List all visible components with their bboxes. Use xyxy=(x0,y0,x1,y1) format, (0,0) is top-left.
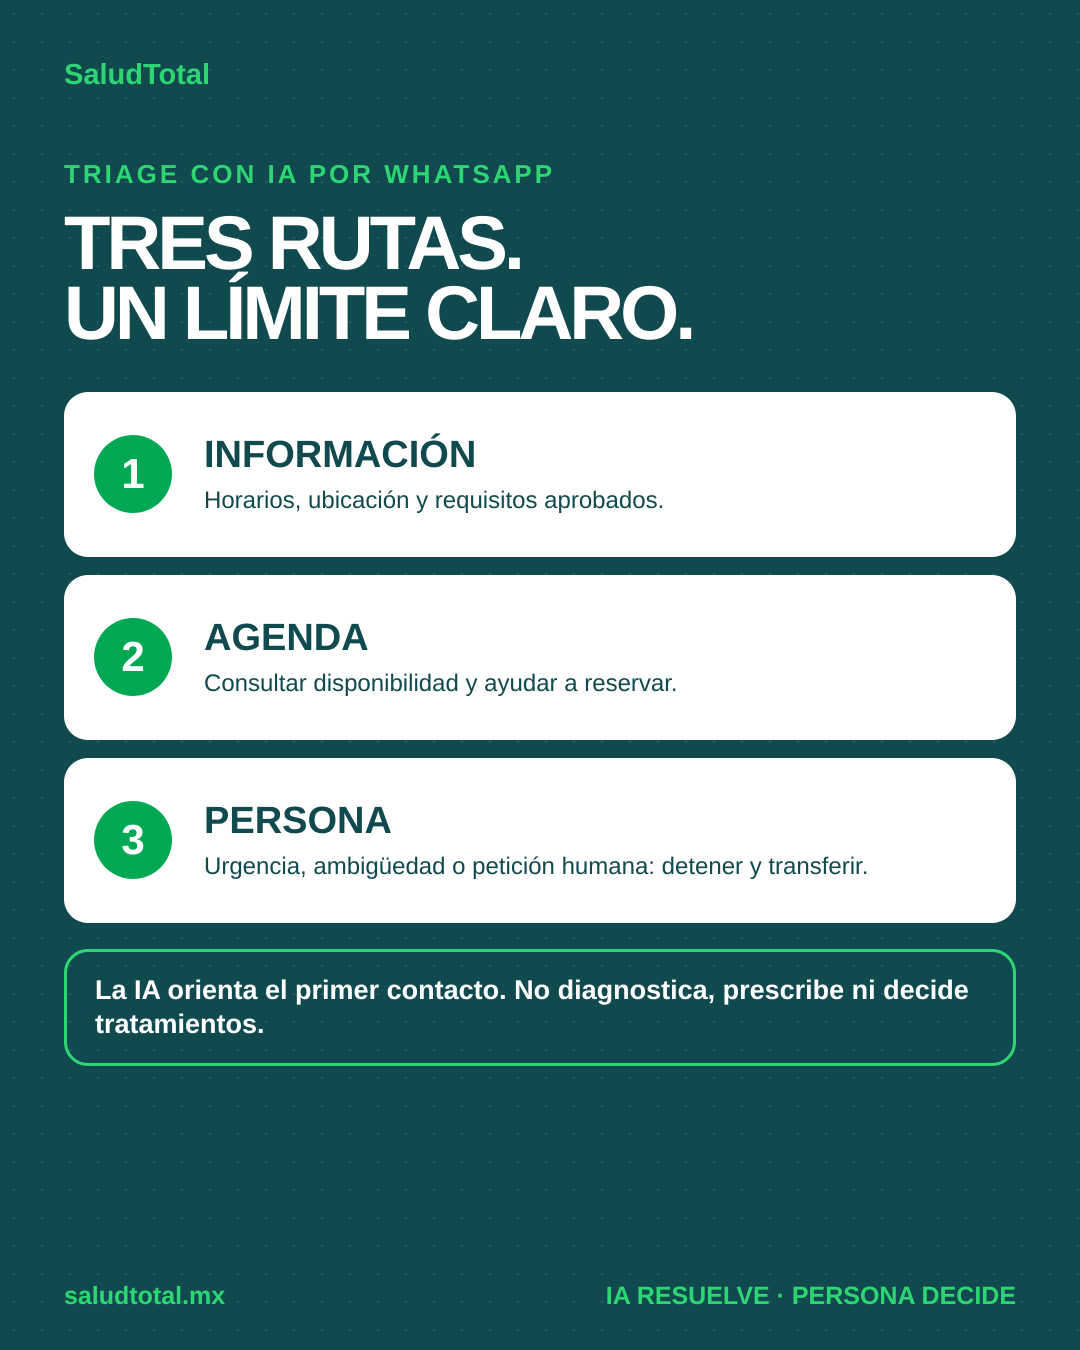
number 2: 2 xyxy=(121,633,145,680)
eyebrow: TRIAGE CON IA POR WHATSAPP xyxy=(64,159,555,189)
card: información xyxy=(64,392,1016,557)
card heading: INFORMACIÓN xyxy=(204,434,476,476)
title xyxy=(64,201,692,356)
number 3 xyxy=(94,801,172,879)
footer tagline: IA RESUELVE · PERSONA DECIDE xyxy=(606,1282,1016,1310)
callout: La IA orienta el primer contacto. No diagnostica, prescribe ni decide tratamientos. xyxy=(95,975,969,1039)
number 1 xyxy=(94,435,172,513)
card: persona xyxy=(64,758,1016,923)
card text: Horarios, ubicación y requisitos aprobados. xyxy=(204,487,664,514)
number 2 xyxy=(94,618,172,696)
card text: Consultar disponibilidad y ayudar a reservar. xyxy=(204,670,678,697)
callout xyxy=(64,949,1016,1066)
brand logo: SaludTotal xyxy=(64,59,210,91)
card: agenda xyxy=(64,575,1016,740)
number 1: 1 xyxy=(121,450,145,497)
footer url: saludtotal.mx xyxy=(64,1282,225,1310)
card heading: AGENDA xyxy=(204,617,369,659)
number 3: 3 xyxy=(121,816,145,863)
card heading: PERSONA xyxy=(204,800,392,842)
title: UN LÍMITE CLARO. xyxy=(64,271,692,356)
title: TRES RUTAS. xyxy=(64,201,521,286)
card text: Urgencia, ambigüedad o petición humana: detener y transferir. xyxy=(204,853,868,880)
